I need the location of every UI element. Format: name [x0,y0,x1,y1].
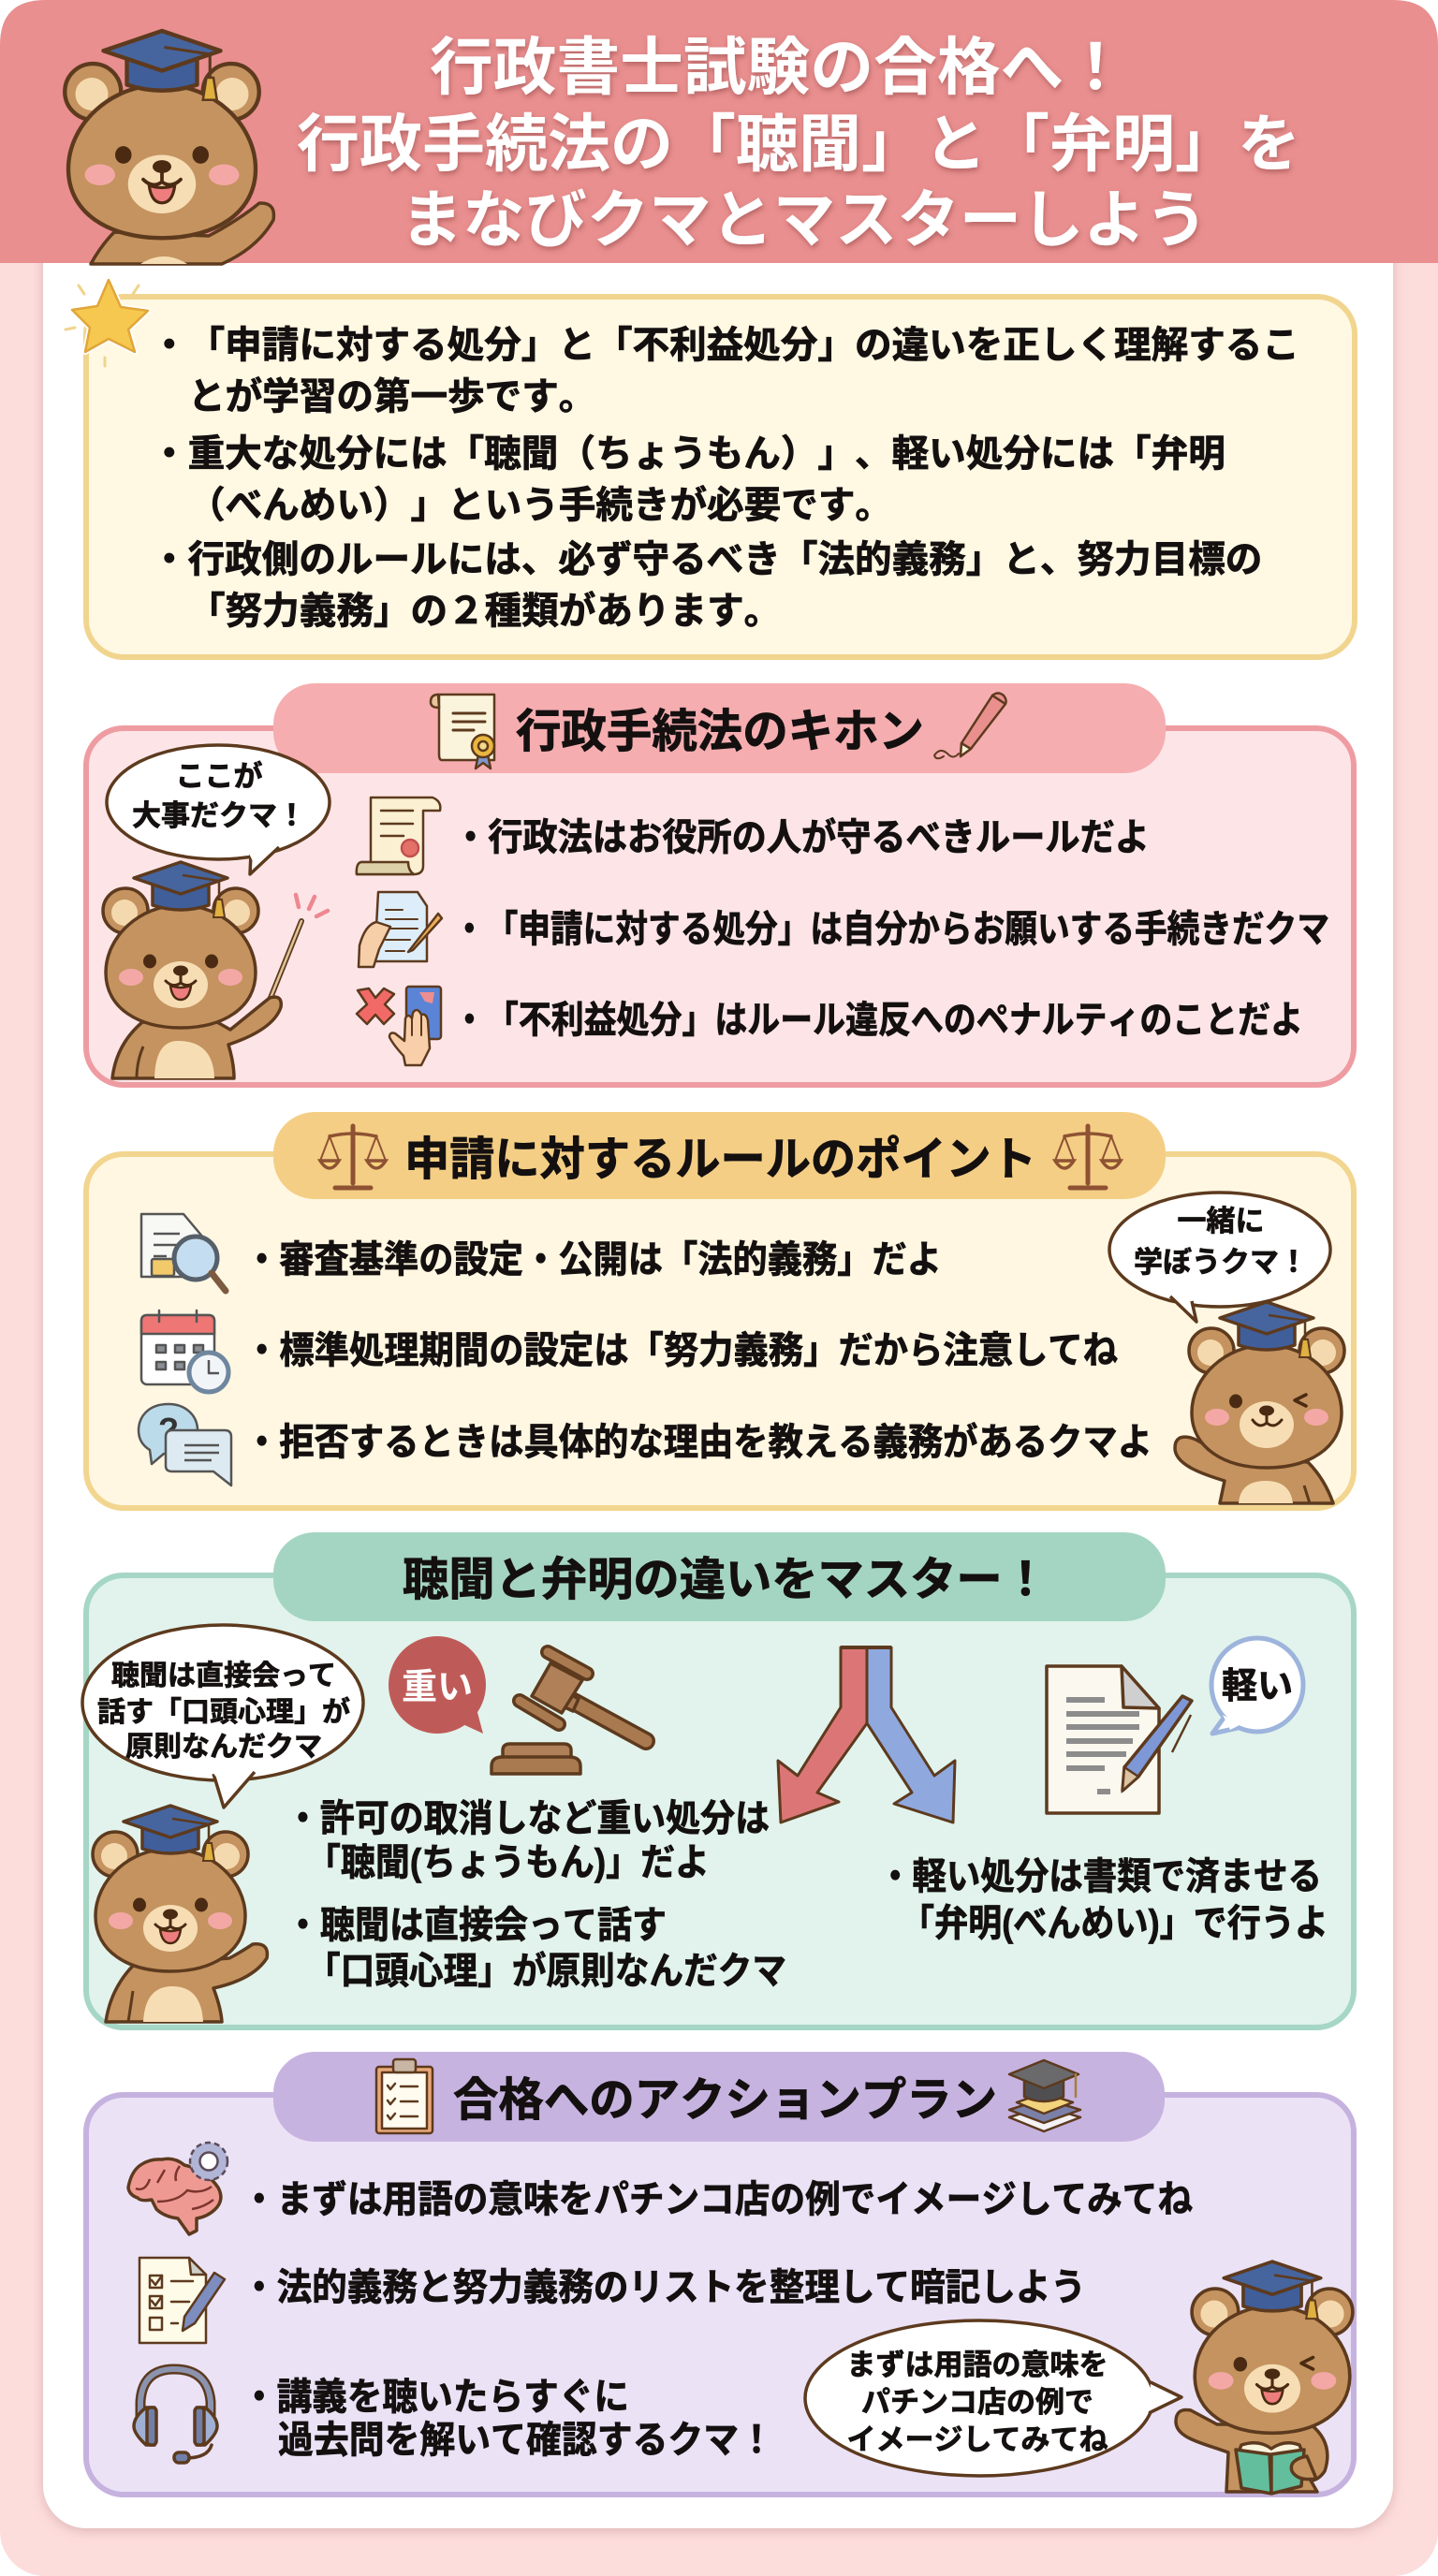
icon: gavel [492,1652,646,1774]
icon: document and pen [1047,1666,1192,1813]
callout: 一緒に学ぼうクマ: 一緒に [1178,1205,1264,1237]
section heading pill: 申請に対するルールのポイント [404,1134,1036,1185]
callout: 一緒に学ぼうクマ: 学ぼうクマ！ [1134,1246,1308,1279]
bullet list: 過去問を解いて確認するクマ！ [278,2420,774,2461]
section heading pill: 合格へのアクションプラン [453,2075,997,2126]
summary text: とが学習の第一歩です。 [188,376,595,417]
bullet list: ・まずは用語の意味をパチンコ店の例でイメージしてみてね [242,2179,1193,2220]
summary text: ・「申請に対する処分」と「不利益処分」の違いを正しく理解するこ [151,325,1299,366]
section heading pill [273,2052,1165,2142]
callout: 口頭心理 [82,1625,363,1808]
arrow: splitting red and blue [778,1647,955,1822]
bullet list: ・「不利益処分」はルール違反へのペナルティのことだよ [453,1000,1303,1041]
icon: graduation cap and books [1009,2060,1080,2131]
text: 聴聞: 「口頭心理」が原則なんだクマ [306,1951,786,1992]
bullet list: ・「申請に対する処分」は自分からお願いする手続きだクマ [453,909,1329,950]
section heading pill [273,1112,1166,1199]
icon: scroll [357,798,440,874]
text: 聴聞: ・許可の取消しなど重い処分は [286,1798,770,1839]
icon: clipboard [376,2059,433,2133]
bullet list: ・講義を聴いたらすぐに [242,2377,629,2418]
summary text: 「努力義務」の２種類があります。 [188,591,781,632]
callout: 口頭心理: 話す「口頭心理」が [97,1696,350,1728]
bullet list: ・行政法はお役所の人が守るべきルールだよ [453,817,1150,858]
text: 聴聞: ・聴聞は直接会って話す [286,1905,667,1946]
title: 行政手続法の「聴聞」と「弁明」を [297,110,1300,180]
mascot: bear with book [1176,2261,1353,2494]
icon: document with hand [359,892,442,967]
icon: checklist with pen [139,2258,225,2343]
bullet list [244,1239,1152,1463]
badge: 軽い [1211,1638,1303,1734]
summary text: ・重大な処分には「聴聞（ちょうもん）」、軽い処分には「弁明 [151,433,1225,475]
badge: 重い [389,1636,486,1734]
icon: pen [934,693,1006,758]
icon: star [66,280,148,366]
mascot: winking bear [1175,1302,1344,1503]
section heading pill: 聴聞と弁明の違いをマスター！ [403,1555,1049,1605]
title [297,33,1300,256]
callout: 口頭心理: 聴聞は直接会って [111,1661,336,1691]
text: 弁明: ・軽い処分は書類で済ませる [878,1856,1322,1897]
section heading pill [273,683,1166,773]
summary text: ・行政側のルールには、必ず守るべき「法的義務」と、努力目標の [151,539,1262,580]
icon: scales right [1055,1126,1121,1188]
callout: ここが大事だクマ [107,745,330,874]
icon: scales left [320,1126,386,1188]
callout: ここが大事だクマ: 大事だクマ！ [132,799,306,832]
callout: パチンコ店の例: まずは用語の意味を [846,2349,1108,2381]
mascot: bear with pointer [103,862,328,1078]
panel: 行政手続法のキホン [86,683,1354,1085]
icon: certificate [431,695,494,768]
bullet list: ・審査基準の設定・公開は「法的義務」だよ [244,1239,942,1281]
callout: パチンコ店の例 [805,2320,1181,2476]
badge: 軽い: 軽い [1222,1667,1293,1706]
panel: summary [66,280,1355,657]
panel: 合格へのアクションプラン [86,2052,1354,2495]
panel: 申請に対するルールのポイント [86,1112,1354,1508]
callout: 一緒に学ぼうクマ [1109,1193,1330,1322]
badge: 重い: 重い [402,1668,473,1707]
title: まなびクマとマスターしよう [401,185,1208,256]
callout: パチンコ店の例: イメージしてみてね [846,2423,1108,2456]
section heading pill: 行政手続法のキホン [516,707,924,757]
icon: question chat bubbles [139,1404,231,1486]
bullet list: ・拒否するときは具体的な理由を教える義務があるクマよ [244,1422,1152,1463]
icon: question chat bubbles: ? [158,1411,179,1449]
section heading pill [273,1532,1166,1621]
text: 弁明 [878,1856,1328,1944]
icon: document with magnifier [141,1214,226,1291]
panel: 聴聞と弁明の違いをマスター [82,1532,1354,2027]
icon: calendar with clock [141,1310,228,1392]
callout: ここが大事だクマ: ここが [176,760,262,793]
header banner [0,0,1438,264]
text: 弁明: 「弁明(べんめい)」で行うよ [901,1903,1328,1944]
icon: brain with gear [128,2143,227,2234]
bullet list [242,2179,1193,2461]
text: 聴聞 [286,1798,786,1992]
summary text [151,325,1299,632]
callout: パチンコ店の例: パチンコ店の例で [861,2386,1093,2419]
icon: rejected card with hand [357,987,441,1065]
callout: 口頭心理: 原則なんだクマ [125,1732,322,1763]
bullet list: ・法的義務と努力義務のリストを整理して暗記しよう [242,2267,1086,2308]
bullet list: ・標準処理期間の設定は「努力義務」だから注意してね [244,1330,1118,1371]
text: 聴聞: 「聴聞(ちょうもん)」だよ [306,1842,710,1883]
icon: headset [134,2369,217,2463]
title: 行政書士試験の合格へ！ [430,33,1127,103]
bullet list [453,817,1329,1041]
mascot: waving bear [93,1806,267,2022]
mascot: header bear [65,31,273,264]
summary text: （べんめい）」という手続きが必要です。 [188,485,892,526]
